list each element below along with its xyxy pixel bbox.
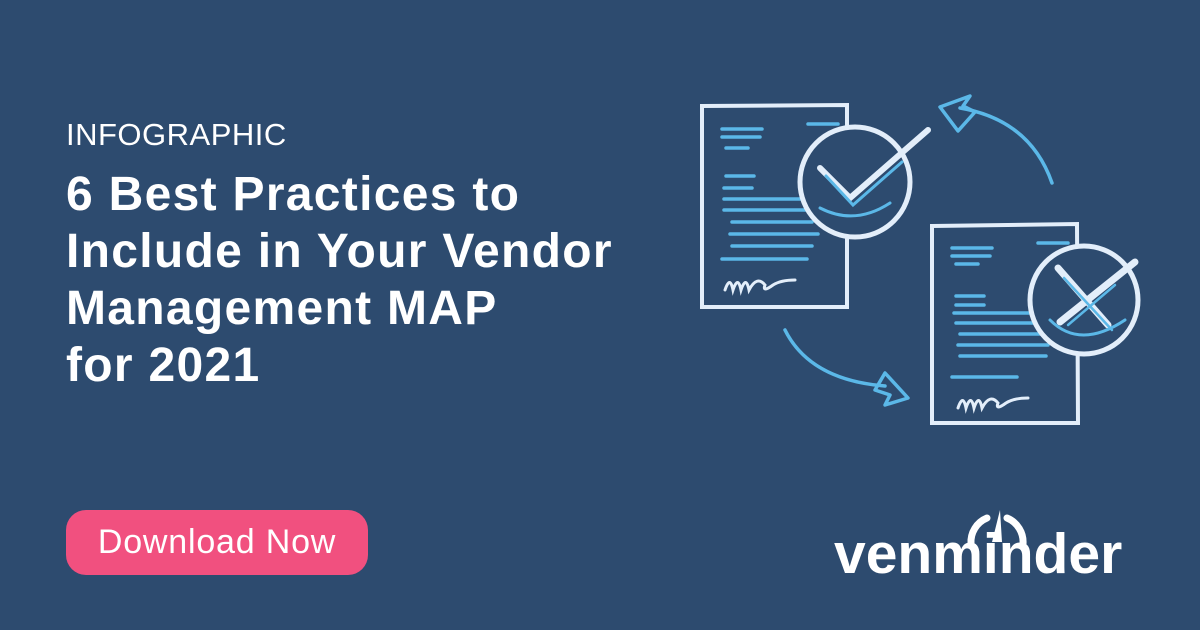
arrow: bottom curved: [785, 330, 908, 405]
headline: 6 Best Practices to: [66, 168, 520, 221]
document 2: [932, 224, 1078, 423]
document 1: [702, 105, 847, 307]
headline: Include in Your Vendor: [66, 225, 613, 278]
check circle: [800, 127, 928, 237]
x circle: [1030, 246, 1138, 354]
headline: [66, 168, 613, 392]
headline: Management MAP: [66, 282, 498, 335]
arrow: top curved: [940, 96, 1052, 183]
button: download now: Download Now: [98, 523, 336, 561]
eyebrow label: INFOGRAPHIC: [66, 117, 287, 152]
logo: venminder: venminder: [834, 522, 1122, 586]
button: download now: [66, 510, 368, 575]
headline: for 2021: [66, 339, 261, 392]
